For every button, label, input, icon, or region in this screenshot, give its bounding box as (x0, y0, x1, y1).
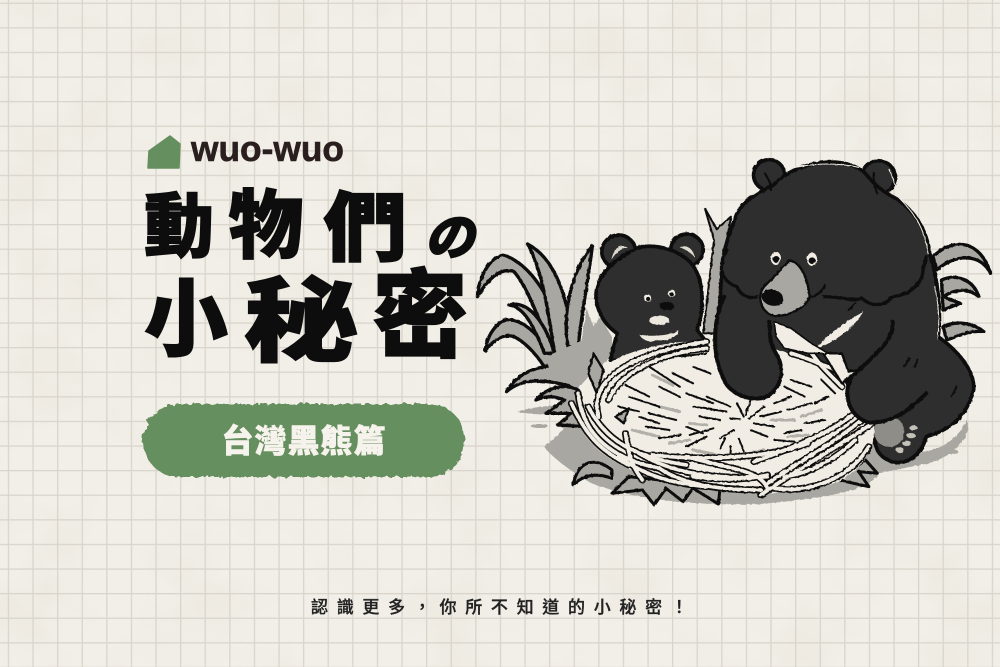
nest base (578, 340, 874, 493)
face lower (757, 280, 823, 317)
footer tagline: 認識更多，你所不知道的小秘密！ (311, 597, 696, 617)
ear creases (765, 173, 877, 193)
nest stray sticks (588, 353, 859, 423)
left arm (715, 290, 781, 399)
title line 2: 密 (372, 264, 468, 371)
nest hatching (619, 353, 835, 458)
hind foot (874, 416, 918, 453)
fur scallop left (722, 250, 757, 298)
logo (148, 128, 344, 169)
illustration: bears in nest (477, 160, 991, 505)
mother body (713, 162, 974, 463)
cub inner ears (611, 246, 695, 260)
title line 2 (144, 264, 468, 374)
title line 1: 物 (228, 184, 304, 268)
cub bear (596, 234, 707, 360)
grass: centre behind bears (703, 208, 731, 333)
title line 1 (144, 184, 479, 271)
title line 2: 小 (144, 273, 228, 367)
nest outer strands (571, 342, 872, 495)
mother ears (754, 160, 895, 194)
nest grey dashes (632, 348, 822, 457)
chest mark centre (774, 322, 828, 353)
cub chest mark (639, 331, 679, 341)
muzzle (760, 261, 810, 316)
title line 1: の (424, 210, 479, 266)
logo wordmark: wuo-wuo (190, 128, 344, 169)
cub nose (660, 302, 674, 310)
fur ticks (849, 303, 957, 397)
mother bear arms (715, 290, 957, 423)
chest mark (815, 312, 864, 349)
left arm outline (715, 297, 781, 399)
cub mouth (649, 316, 669, 325)
highlight along back (788, 164, 939, 340)
title line 2: 秘 (243, 272, 359, 374)
cub head and body (596, 246, 707, 360)
mother bear face (722, 250, 926, 317)
nose (760, 287, 785, 308)
title line 1: 動 (144, 188, 214, 266)
fur scallop right (822, 257, 926, 304)
subtitle badge (143, 404, 465, 477)
icon: green house (148, 136, 180, 168)
right arm (847, 320, 938, 423)
cub eyes (644, 290, 676, 302)
grass: right clump (933, 244, 991, 340)
nest strand fill (571, 342, 872, 495)
right arm outline (847, 322, 926, 423)
grass: bottom spikes (573, 460, 877, 505)
left eye (771, 252, 781, 265)
small shadow marks (531, 424, 958, 454)
badge shape (143, 404, 465, 477)
cub ears (602, 234, 703, 268)
grass: left clump (477, 244, 615, 427)
mother bear body (713, 160, 974, 463)
right eye (807, 253, 817, 266)
smile (810, 286, 825, 297)
badge text: 台灣黑熊篇 (221, 423, 387, 459)
title line 1: 們 (323, 187, 407, 271)
nest (571, 340, 874, 495)
nest shadow (517, 403, 968, 504)
title (144, 184, 479, 374)
